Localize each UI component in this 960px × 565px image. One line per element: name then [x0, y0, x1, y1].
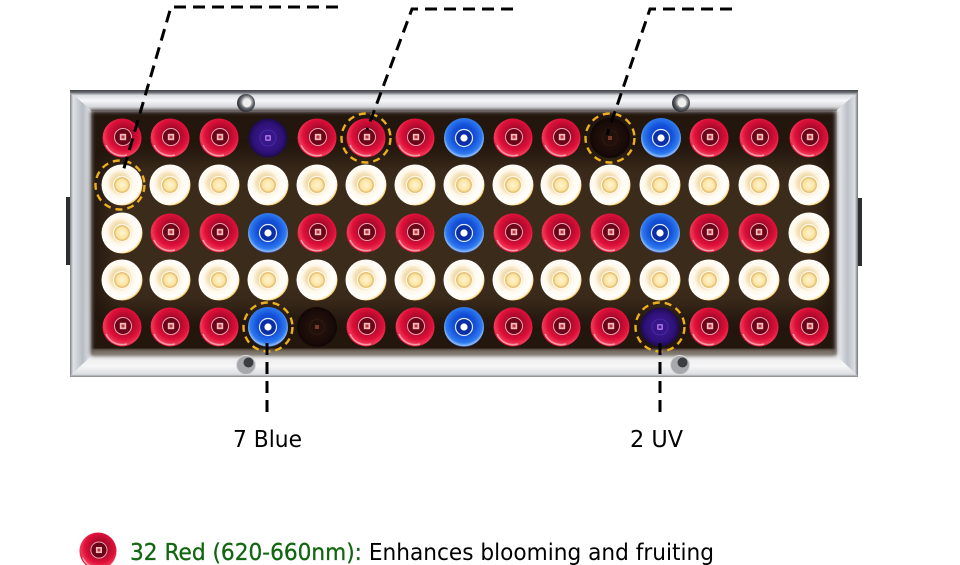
LED row 5 — [102, 307, 828, 347]
side bracket left — [66, 197, 72, 265]
label: 2 UV: 2 UV — [630, 427, 683, 453]
leader line: top centre — [367, 9, 513, 130]
dark LED board — [91, 111, 836, 355]
aluminium frame — [70, 90, 858, 377]
LED row 3 — [102, 212, 830, 254]
dashed highlight rings — [96, 114, 684, 352]
light housing — [66, 90, 862, 377]
label: 7 Blue: 7 Blue — [233, 427, 302, 453]
legend icon: red LED — [79, 532, 117, 565]
leader line: blue — [266, 343, 268, 417]
side bracket right — [856, 198, 862, 266]
warm light glow around white LEDs — [104, 160, 824, 310]
LED row 2 — [102, 164, 830, 206]
leader line: UV — [658, 343, 662, 417]
mounting screws — [236, 94, 690, 374]
leader line: top right — [607, 9, 732, 135]
LED row 4 — [102, 260, 830, 300]
leader line: top left — [122, 7, 338, 175]
bottom reflection on board — [92, 349, 835, 355]
LED row 1 — [102, 118, 828, 158]
